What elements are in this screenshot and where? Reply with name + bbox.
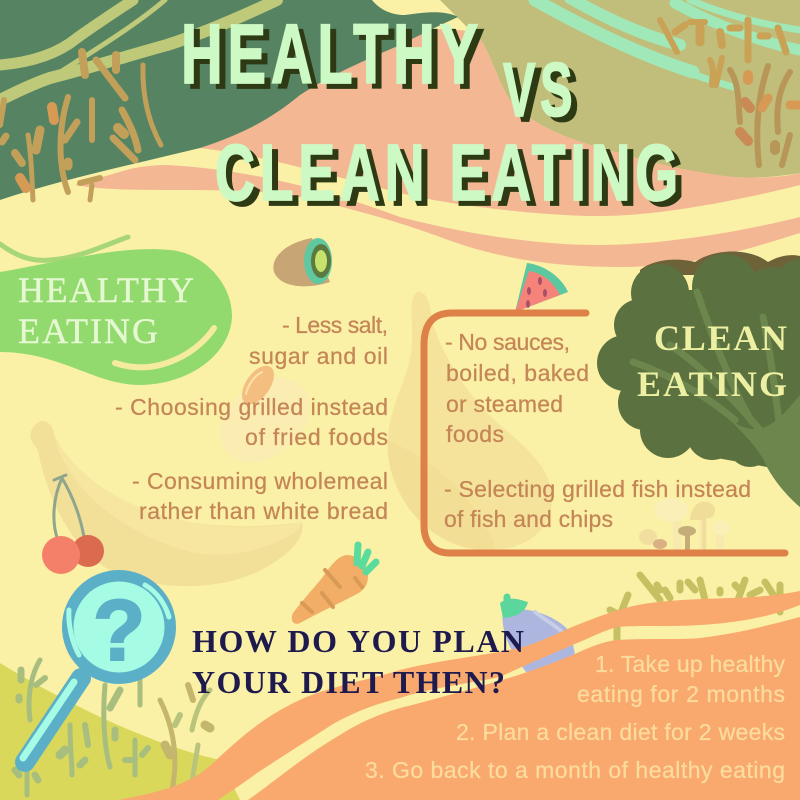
text block: clean eating list: - No sauces, [445,329,570,355]
icon: cherries [42,475,104,574]
background: dark green hill [0,0,458,200]
text block: clean eating list: boiled, baked [446,360,589,386]
background: olive top right [360,0,800,178]
icon: eggplant [500,597,575,677]
icon: orange fruit [236,360,280,410]
background: orange main field [248,617,800,800]
decorative: banana highlight [54,436,302,555]
heading: clean eating: CLEAN [654,318,787,358]
text block: clean eating list: or steamed [446,391,563,417]
decorative: mushrooms [639,498,730,553]
background: orange upper ribbon [118,591,800,800]
text block: healthy eating list: - Consuming wholemeal [132,468,388,494]
text block: healthy eating list: of fried foods [245,424,388,450]
icon: magnifying glass [23,570,176,762]
plants: bottom left [15,660,210,795]
heading: clean eating: EATING [637,364,787,404]
decorative: light green curve [0,237,128,260]
text block: diet plan steps: eating for 2 months [577,681,785,707]
text block: diet plan steps [365,651,786,783]
title: VS [503,48,577,133]
plants: bottom right [610,575,780,640]
text block: healthy eating list [115,312,388,524]
decorative: olive curved bands on green [0,0,277,100]
plants: top left [0,52,161,200]
decorative: ghost fruit behind text [204,360,326,480]
text block: diet plan steps: 3. Go back to a month of healthy eating [365,757,785,783]
background: salmon wave [75,29,800,267]
decorative: mint grass strokes top right [535,0,800,87]
text block: diet plan steps: 1. Take up healthy [595,651,786,677]
title [181,7,683,217]
decorative: pear lower shade [388,440,494,550]
icon: carrot [292,545,376,624]
title: HEALTHY [181,7,483,101]
heading: clean eating [637,318,787,404]
panel: healthy eating blob [0,249,232,385]
text block: healthy eating list: - Choosing grilled instead [115,394,388,420]
icon: watermelon [515,263,568,312]
icon text: question mark: ? [93,583,145,679]
frame: clean eating bracket [424,313,785,553]
decorative: lime hill [0,663,240,800]
text block: healthy eating list: - Less salt, [282,312,388,338]
heading: how do you plan your diet then: YOUR DIET THEN? [192,664,505,700]
broccoli stem [633,292,800,507]
heading: how do you plan your diet then [192,623,524,700]
plants: top right [660,20,800,165]
icon: kiwi [273,238,332,286]
text block: clean eating list [444,329,751,532]
heading: healthy eating [18,270,194,351]
text block: clean eating list: foods [446,421,504,447]
decorative: pear [388,292,552,550]
text block: clean eating list: - Selecting grilled fish instead [444,476,751,502]
heading: how do you plan your diet then: HOW DO YOU PLAN [192,623,524,659]
background: cream ribbon [75,148,800,245]
text block: diet plan steps: 2. Plan a clean diet for 2 weeks [456,719,785,745]
heading: healthy eating: HEALTHY [18,270,194,310]
icon: broccoli [597,252,800,507]
text block: healthy eating list: sugar and oil [249,343,388,369]
heading: healthy eating: EATING [18,311,158,351]
text block: healthy eating list: rather than white bread [139,498,388,524]
text block: clean eating list: of fish and chips [444,506,613,532]
decorative: banana background [30,421,303,586]
